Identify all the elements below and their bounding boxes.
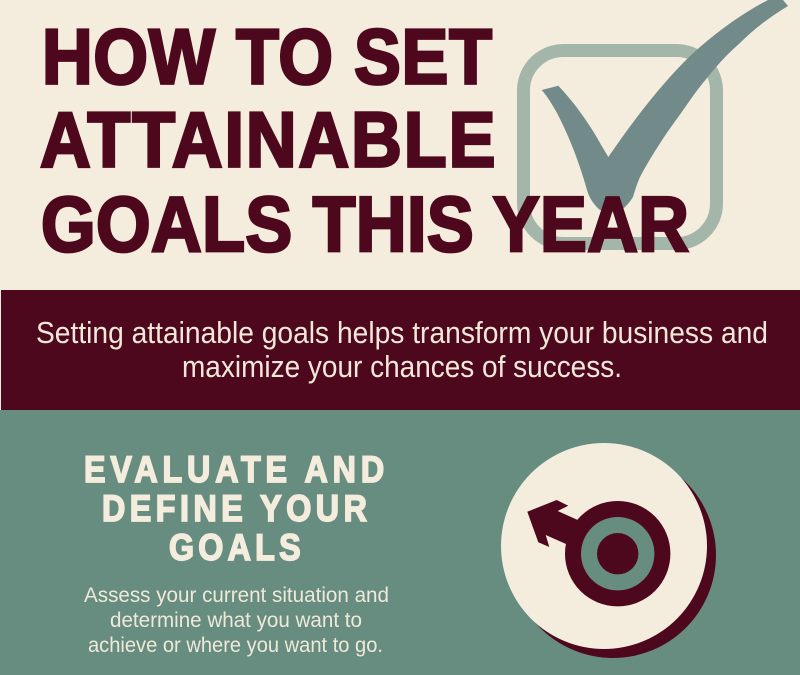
icon: arrow: [527, 500, 590, 547]
title: HOW TO SET: [42, 13, 492, 100]
icon: rounded checkbox: [524, 50, 716, 244]
title: ATTAINABLE: [40, 96, 495, 183]
intro text: maximize your chances of success.: [182, 349, 622, 384]
body text: achieve or where you want to go.: [88, 633, 383, 657]
heading: evaluate and define your goals: DEFINE YOUR: [102, 488, 367, 530]
heading: evaluate and define your goals: GOALS: [169, 527, 301, 569]
panel: header background: [0, 0, 800, 290]
intro text: [36, 315, 768, 384]
icon: target bullseye: [597, 533, 638, 574]
heading: evaluate and define your goals: [84, 449, 384, 569]
icon: check mark: [542, 0, 788, 213]
body text: determine what you want to: [110, 608, 362, 632]
body text: [84, 583, 389, 657]
heading: evaluate and define your goals: EVALUATE AND: [84, 449, 384, 491]
icon: target teal ring: [581, 517, 654, 590]
icon: target outer ring: [565, 501, 670, 606]
title: [40, 13, 689, 268]
icon: checkbox with check mark: [524, 0, 788, 244]
panel: intro band: [1, 290, 800, 410]
icon: cream disc: [501, 443, 707, 649]
body text: Assess your current situation and: [84, 583, 389, 607]
icon: circle shadow: [510, 452, 716, 658]
panel: evaluate section background: [0, 410, 800, 675]
icon: target with arrow: [501, 443, 716, 658]
title: GOALS THIS YEAR: [41, 181, 689, 268]
